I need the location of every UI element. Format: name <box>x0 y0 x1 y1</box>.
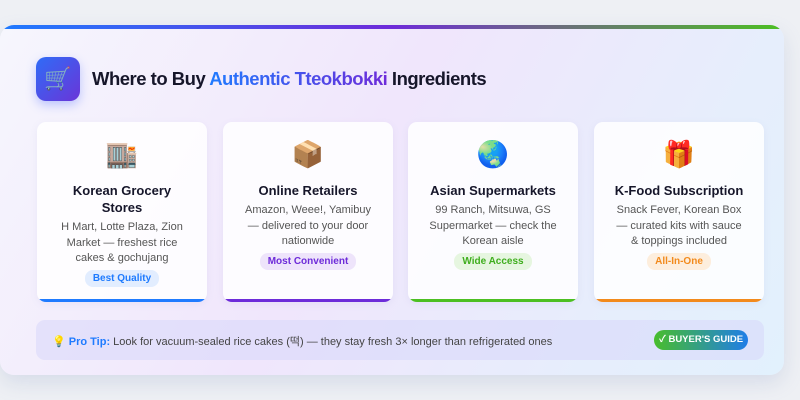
callout: pro tip: ✓ BUYER'S GUIDE <box>659 334 743 345</box>
card: korean grocery: H Mart, Lotte Plaza, Zion Market — freshest rice cakes & gochujang <box>61 221 183 264</box>
title: Where to Buy Authentic Tteokbokki Ingredients <box>92 68 486 89</box>
card: subscription: All-In-One <box>655 256 703 266</box>
card: subscription: K-Food Subscription <box>615 183 743 198</box>
card: subscription: Snack Fever, Korean Box — curated kits with sauce & toppings included <box>616 204 742 247</box>
card: asian supermarkets: 99 Ranch, Mitsuwa, GS Supermarket — check the Korean aisle <box>429 204 557 247</box>
icon: cart <box>36 57 80 101</box>
card: subscription: 🎁 <box>663 139 695 169</box>
card: korean grocery: Best Quality <box>93 272 151 284</box>
card: asian supermarkets: Wide Access <box>462 256 524 266</box>
card: korean grocery <box>37 122 207 302</box>
card: asian supermarkets: 🌏 <box>477 139 509 169</box>
card: korean grocery: Korean Grocery Stores <box>73 183 171 215</box>
callout: pro tip <box>36 320 764 360</box>
card: subscription <box>594 122 764 302</box>
card: asian supermarkets: Asian Supermarkets <box>430 183 556 198</box>
card: korean grocery: 🏬 <box>106 139 138 169</box>
card: online: 📦 <box>292 139 324 169</box>
callout: pro tip: 💡 Pro Tip: Look for vacuum-sealed rice cakes (떡) — they stay fresh 3× longer than refrigerated ones <box>52 336 552 348</box>
card: online: Online Retailers <box>258 183 357 198</box>
card: online: Most Convenient <box>268 256 348 266</box>
card: online: Amazon, Weee!, Yamibuy — delivered to your door nationwide <box>245 204 371 247</box>
icon: cart: 🛒 <box>44 66 72 91</box>
card: online <box>223 122 393 302</box>
card: asian supermarkets <box>408 122 578 302</box>
